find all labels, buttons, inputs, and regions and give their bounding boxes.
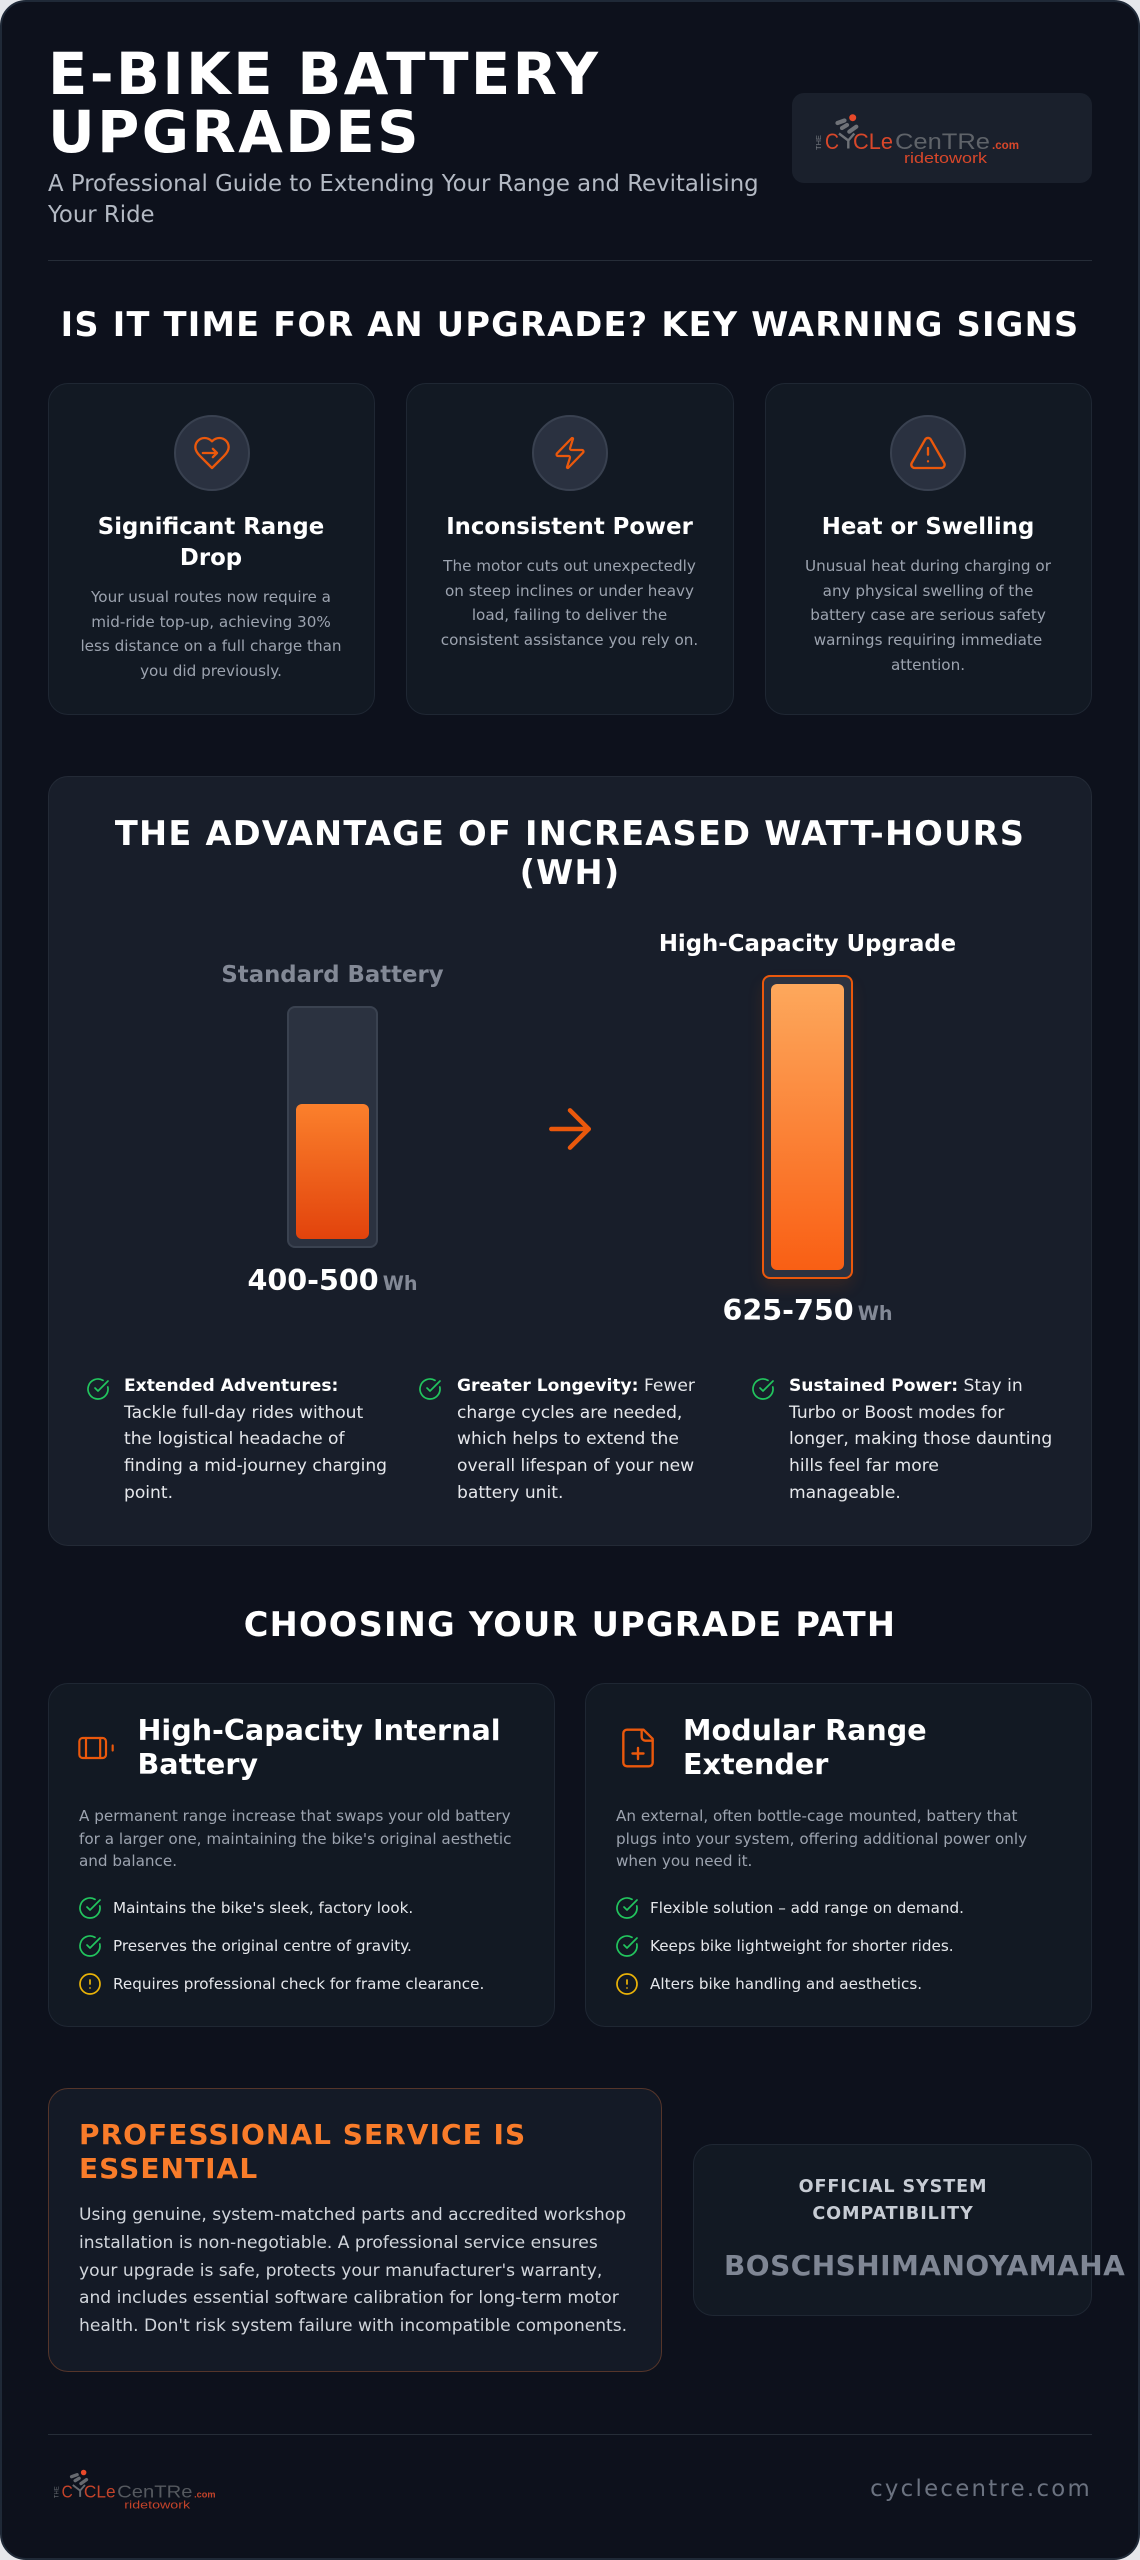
logo: The Cycle Centre: THE (54, 2486, 60, 2498)
heading (79, 2118, 526, 2185)
compatibility heading: OFFICIAL SYSTEM (799, 2177, 987, 2197)
text: point. (124, 1483, 173, 1503)
website: cyclecentre.com (870, 2476, 1092, 2502)
panel: professional service (48, 2088, 662, 2372)
footer (48, 2450, 1092, 2530)
item: Preserves the original centre of gravity. (113, 1937, 412, 1955)
heading: Drop (180, 545, 242, 571)
footer divider (48, 2434, 1092, 2435)
icon: check (79, 1897, 101, 1919)
panel: advantage of watt-hours (48, 776, 1092, 1546)
body text: on steep inclines or under heavy (445, 582, 694, 600)
body text: warnings requiring immediate (814, 631, 1042, 649)
header (48, 41, 1092, 228)
body text: Using genuine, system-matched parts and accredited workshop (79, 2205, 626, 2225)
body text: less distance on a full charge than (80, 637, 342, 655)
body text: consistent assistance you rely on. (441, 631, 698, 649)
text: Turbo or Boost modes for (789, 1403, 1004, 1423)
text: Sustained Power: Stay in (789, 1376, 1023, 1396)
battery shell (762, 975, 853, 1279)
icon: lightning (532, 415, 608, 491)
body text: load, failing to deliver the (472, 606, 667, 624)
text: which helps to extend the (457, 1429, 679, 1449)
item: Keeps bike lightweight for shorter rides. (650, 1937, 954, 1955)
logo: The Cycle Centre (48, 2452, 248, 2512)
heading (138, 1713, 501, 1781)
section heading: advantage: (WH) (520, 853, 620, 892)
title (48, 41, 600, 166)
standard battery (221, 962, 444, 1297)
icon: heart (174, 415, 250, 491)
heading (98, 514, 324, 571)
battery fill (771, 984, 844, 1270)
logo: The Cycle Centre (814, 114, 1019, 167)
text (788, 1376, 1052, 1503)
logo: The Cycle Centre: THE (814, 135, 823, 150)
description: A permanent range increase that swaps your old battery (79, 1807, 511, 1825)
text: finding a mid-journey charging (124, 1456, 387, 1476)
item: Flexible solution – add range on demand. (650, 1899, 964, 1917)
icon: file plus (622, 1728, 654, 1768)
logo panel (792, 93, 1092, 183)
label: High-Capacity Upgrade (659, 931, 956, 957)
text: Tackle full-day rides without (124, 1403, 363, 1423)
title: UPGRADES (48, 99, 421, 166)
icon: check (752, 1378, 774, 1400)
section heading: warning signs: IS IT TIME FOR AN UPGRADE? KEY WARNING SIGNS (61, 305, 1079, 344)
item: Requires professional check for frame clearance. (113, 1975, 484, 1993)
text: overall lifespan of your new (457, 1456, 694, 1476)
text: the logistical headache of (124, 1429, 345, 1449)
description: plugs into your system, offering additional power only (616, 1830, 1027, 1848)
body text: you did previously. (140, 662, 282, 680)
panel: heat or swelling (765, 383, 1092, 715)
body text: and includes essential software calibration for long-term motor (79, 2288, 619, 2308)
logo: The Cycle Centre: .com (194, 2489, 216, 2500)
section heading: upgrade path: CHOOSING YOUR UPGRADE PATH (244, 1605, 896, 1644)
benefits list (87, 1376, 1052, 1503)
body text: any physical swelling of the (823, 582, 1033, 600)
icon: check (419, 1378, 441, 1400)
capacity value: 400-500Wh (247, 1263, 418, 1297)
logo: The Cycle Centre: ridetowork (904, 151, 988, 167)
panel: internal battery (48, 1683, 555, 2027)
description: for a larger one, maintaining the bike's original aesthetic (79, 1830, 511, 1848)
benefit: greater longevity (419, 1376, 695, 1503)
body text (79, 2205, 627, 2336)
heading: Extender (683, 1747, 828, 1781)
logo: The Cycle Centre: C (62, 2481, 73, 2501)
logo: The Cycle Centre: CLe (853, 129, 893, 154)
heading: ESSENTIAL (79, 2152, 258, 2185)
heading: PROFESSIONAL SERVICE IS (79, 2118, 526, 2151)
heading: High-Capacity Internal (138, 1713, 501, 1747)
body text: installation is non-negotiable. A professional service ensures (79, 2233, 598, 2253)
body text: attention. (891, 656, 965, 674)
text: manageable. (789, 1483, 901, 1503)
icon: battery (78, 1736, 114, 1760)
divider (48, 260, 1092, 261)
body text: battery case are serious safety (810, 606, 1046, 624)
icon: check (616, 1897, 638, 1919)
icon: arrow (549, 1108, 591, 1150)
logo: The Cycle Centre: ridetowork (124, 2499, 190, 2511)
body text: health. Don't risk system failure with incompatible components. (79, 2316, 627, 2336)
heading: Modular Range (683, 1713, 927, 1747)
compatibility heading: COMPATIBILITY (812, 2204, 974, 2224)
body text: The motor cuts out unexpectedly (443, 557, 696, 575)
item: Alters bike handling and aesthetics. (650, 1975, 922, 1993)
icon: check (79, 1935, 101, 1957)
logo: The Cycle Centre: C (825, 129, 839, 154)
body text: your upgrade is safe, protects your manufacturer's warranty, (79, 2261, 602, 2281)
text: Greater Longevity: Fewer (457, 1376, 695, 1396)
body text (80, 588, 342, 680)
description (79, 1807, 511, 1870)
text: longer, making those daunting (789, 1429, 1052, 1449)
item: Maintains the bike's sleek, factory look. (113, 1899, 413, 1917)
body text (441, 557, 698, 649)
logo: The Cycle Centre: .com (992, 138, 1019, 152)
brand names: BOSCHSHIMANOYAMAHA (724, 2249, 1125, 2282)
body text: Unusual heat during charging or (805, 557, 1051, 575)
text: battery unit. (457, 1483, 563, 1503)
description: An external, often bottle-cage mounted, battery that (616, 1807, 1018, 1825)
pros and cons list (616, 1897, 964, 1995)
panel: inconsistent power (406, 383, 734, 715)
logo: The Cycle Centre: CenTRe (895, 129, 990, 154)
subtitle (48, 171, 759, 228)
text: hills feel far more (789, 1456, 939, 1476)
text (457, 1376, 695, 1503)
heading: Battery (138, 1747, 258, 1781)
battery fill (296, 1104, 369, 1239)
capacity value: 625-750Wh (722, 1293, 893, 1327)
icon: alert (616, 1973, 638, 1995)
subtitle: Your Ride (48, 202, 155, 228)
description: when you need it. (616, 1852, 752, 1870)
body text (805, 557, 1051, 674)
description (616, 1807, 1027, 1870)
body text: mid-ride top-up, achieving 30% (91, 613, 331, 631)
panel: range extender (585, 1683, 1092, 2027)
heading: Inconsistent Power (446, 514, 693, 540)
heading (683, 1713, 927, 1781)
section heading: advantage: THE ADVANTAGE OF INCREASED WATT-HOURS (115, 814, 1025, 853)
description: and balance. (79, 1852, 177, 1870)
heading: Significant Range (98, 514, 324, 540)
body text: Your usual routes now require a (91, 588, 331, 606)
icon: check (616, 1935, 638, 1957)
benefit: sustained power (752, 1376, 1052, 1503)
text (124, 1376, 387, 1503)
benefit: extended adventures (87, 1376, 387, 1503)
icon: alert (79, 1973, 101, 1995)
subtitle: A Professional Guide to Extending Your Range and Revitalising (48, 171, 759, 197)
icon: warning triangle (890, 415, 966, 491)
battery shell (287, 1006, 378, 1248)
logo: The Cycle Centre: CLe (84, 2481, 116, 2501)
text: charge cycles are needed, (457, 1403, 682, 1423)
panel: system compatibility (693, 2144, 1092, 2316)
label: Standard Battery (221, 962, 444, 988)
logo: The Cycle Centre: CenTRe (117, 2481, 193, 2501)
heading: Heat or Swelling (822, 514, 1034, 540)
high-capacity battery (659, 931, 956, 1327)
section heading: advantage (115, 814, 1025, 892)
icon: check (87, 1378, 109, 1400)
pros and cons list (79, 1897, 484, 1995)
title: E-BIKE BATTERY (48, 41, 600, 108)
compatibility heading (694, 2174, 1092, 2228)
panel: range drop (48, 383, 375, 715)
text: Extended Adventures: (124, 1376, 338, 1396)
